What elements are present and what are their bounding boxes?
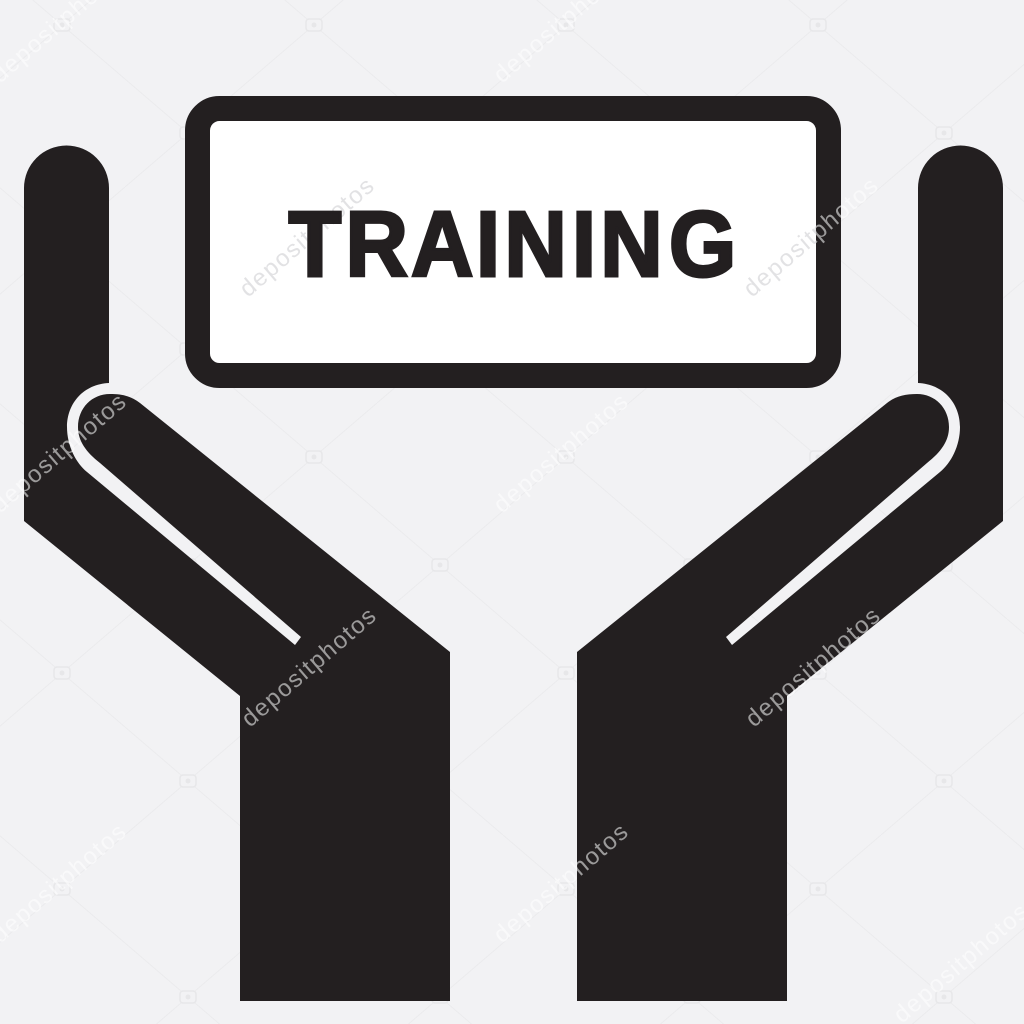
sign: training frame: [198, 108, 828, 376]
sign label: TRAINING: [288, 193, 736, 297]
watermark: depositphotos: [488, 819, 633, 949]
watermark: depositphotos: [488, 389, 633, 519]
watermark: depositphotos: [740, 603, 885, 733]
watermark: depositphotos: [236, 603, 381, 733]
watermark on sign: depositphotos: [234, 173, 379, 303]
icon: left hand: [24, 146, 450, 1001]
watermark on sign: depositphotos: [738, 173, 883, 303]
icon: right hand: [577, 146, 1003, 1001]
watermark on sign: [242, 181, 816, 296]
watermark: depositphotos: [738, 173, 883, 303]
watermark: depositphotos: [234, 173, 379, 303]
